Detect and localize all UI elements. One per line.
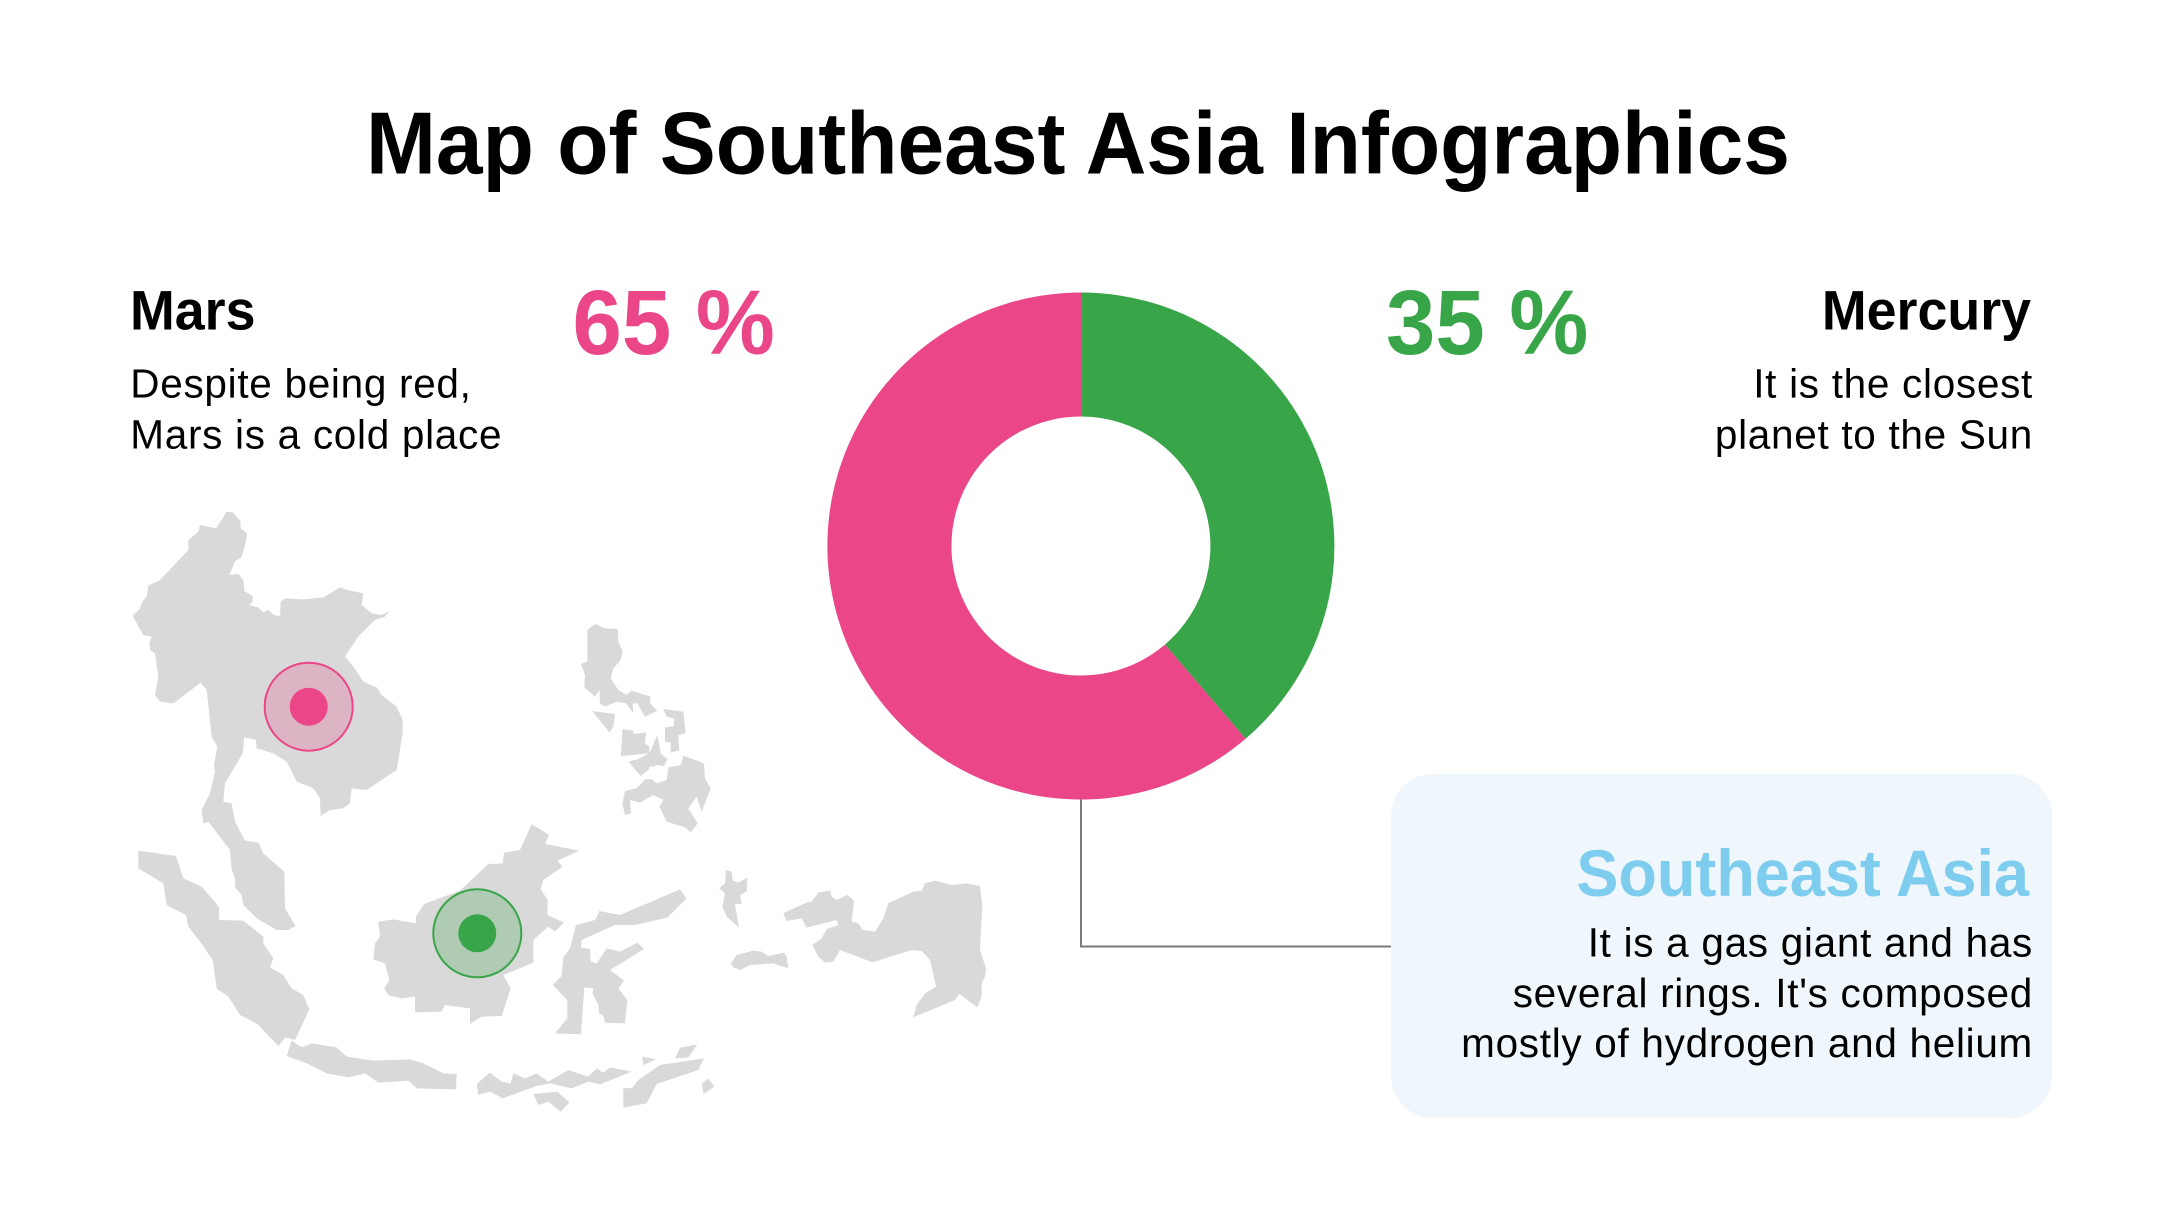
map: Sulawesi, Maluku and Papua bbox=[553, 870, 986, 1108]
callout heading: Southeast Asia bbox=[1576, 837, 2030, 910]
panel: Mars text bbox=[130, 278, 502, 457]
callout background bbox=[1391, 774, 2052, 1118]
stat: 65 percent: 65 % bbox=[572, 272, 775, 374]
callout text: mostly of hydrogen and helium bbox=[1461, 1020, 2033, 1066]
callout text: It is a gas giant and has bbox=[1588, 920, 2033, 966]
stat: 35 percent: 35 % bbox=[1386, 272, 1588, 374]
map: mainland Southeast Asia bbox=[133, 512, 403, 930]
map: Sumatra, Java, Borneo and Sunda islands bbox=[138, 824, 632, 1112]
text block: Mercury description: planet to the Sun bbox=[1715, 411, 2033, 457]
panel: Southeast Asia callout bbox=[1391, 774, 2052, 1118]
map: Philippines bbox=[581, 624, 711, 832]
text block: Mars description: Mars is a cold place bbox=[130, 411, 502, 457]
text block: Mercury description: It is the closest bbox=[1753, 360, 2033, 406]
panel: Mercury text bbox=[1715, 278, 2033, 457]
map of Southeast Asia bbox=[133, 512, 986, 1112]
map pin: Mars bbox=[265, 663, 353, 751]
connector line bbox=[1081, 797, 1392, 946]
donut chart bbox=[827, 292, 1334, 799]
text block: Mars description: Despite being red, bbox=[130, 360, 472, 406]
callout text: several rings. It's composed bbox=[1513, 970, 2033, 1016]
donut segment: pink 65% bbox=[827, 292, 1246, 799]
donut segment: green 35% bbox=[1081, 292, 1334, 739]
heading: Mercury: Mercury bbox=[1822, 278, 2031, 342]
title: Map of Southeast Asia Infographics bbox=[366, 95, 1790, 193]
map pin: Mercury bbox=[433, 889, 521, 977]
heading: Mars: Mars bbox=[130, 278, 255, 342]
